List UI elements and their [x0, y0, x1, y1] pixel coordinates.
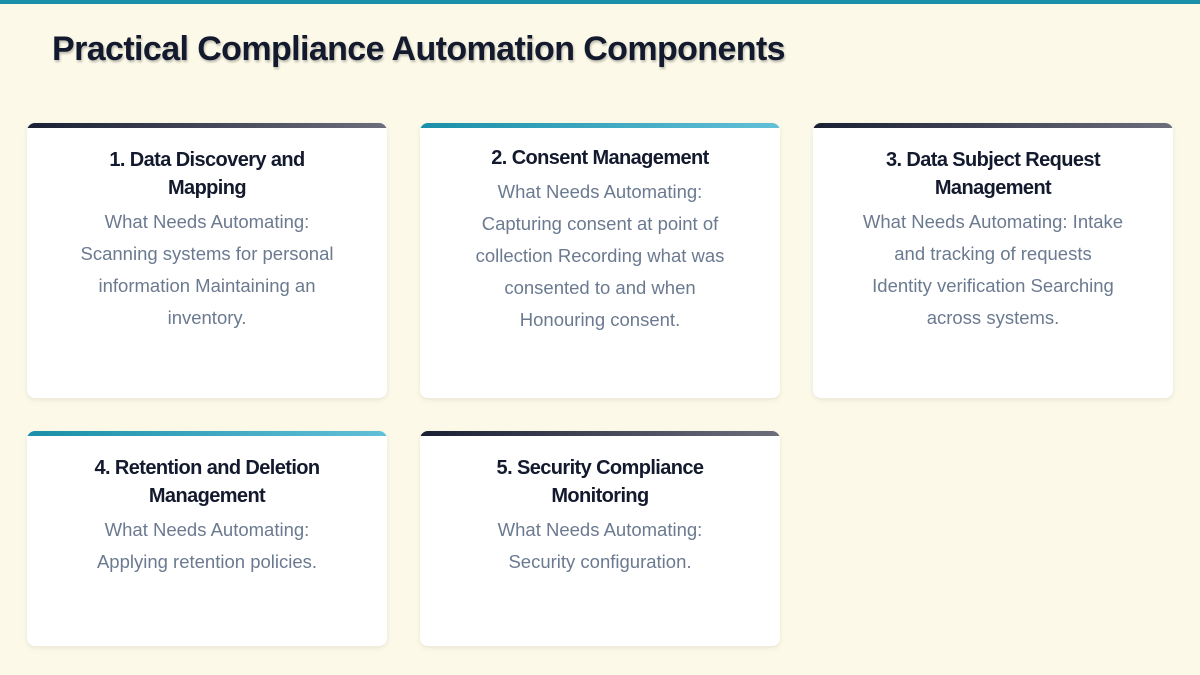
text: consent management: Honouring consent. [520, 309, 680, 330]
text: data discovery [81, 211, 333, 328]
heading: retention and deletion: Management [149, 485, 265, 507]
text: consent management: collection Recording what was [476, 245, 724, 266]
text: data subject request: and tracking of requests [894, 243, 1092, 264]
heading: data discovery: 1. Data Discovery and [109, 149, 305, 171]
text: security compliance: What Needs Automating: [498, 519, 702, 540]
text: retention and deletion [97, 519, 317, 572]
heading: security compliance: 5. Security Compliance [497, 457, 703, 479]
heading: retention and deletion [94, 457, 320, 507]
heading: data subject request: 3. Data Subject Request [886, 149, 1100, 171]
text: data discovery: inventory. [168, 307, 246, 328]
panel: data discovery [27, 123, 387, 398]
text: consent management: What Needs Automating: [498, 181, 702, 202]
title: Practical Compliance Automation Components [52, 30, 785, 68]
text: security compliance: Security configuration. [508, 551, 692, 572]
text: data subject request: What Needs Automating: Intake [863, 211, 1123, 232]
heading: security compliance: Monitoring [551, 485, 649, 507]
heading: data discovery [109, 149, 305, 199]
heading: consent management: 2. Consent Management [491, 147, 709, 169]
text: data discovery: information Maintaining an [98, 275, 316, 296]
panel: consent management [420, 123, 780, 398]
text: consent management: consented to and when [504, 277, 696, 298]
panel: data subject request [813, 123, 1173, 398]
text: data subject request: Identity verification Searching [872, 275, 1114, 296]
text: consent management [476, 181, 724, 330]
heading: data subject request: Management [935, 177, 1051, 199]
text: data subject request [863, 211, 1123, 328]
heading: data discovery: Mapping [168, 177, 246, 199]
text: data discovery: Scanning systems for personal [81, 243, 333, 264]
text: consent management: Capturing consent at point of [482, 213, 718, 234]
text: security compliance [498, 519, 702, 572]
heading: data subject request [886, 149, 1100, 199]
text: data subject request: across systems. [927, 307, 1059, 328]
heading: retention and deletion: 4. Retention and Deletion [94, 457, 320, 479]
panel: security compliance [420, 431, 780, 646]
text: retention and deletion: What Needs Automating: [105, 519, 309, 540]
text: retention and deletion: Applying retention policies. [97, 551, 317, 572]
text: data discovery: What Needs Automating: [105, 211, 309, 232]
heading: security compliance [497, 457, 704, 507]
panel: retention and deletion [27, 431, 387, 646]
